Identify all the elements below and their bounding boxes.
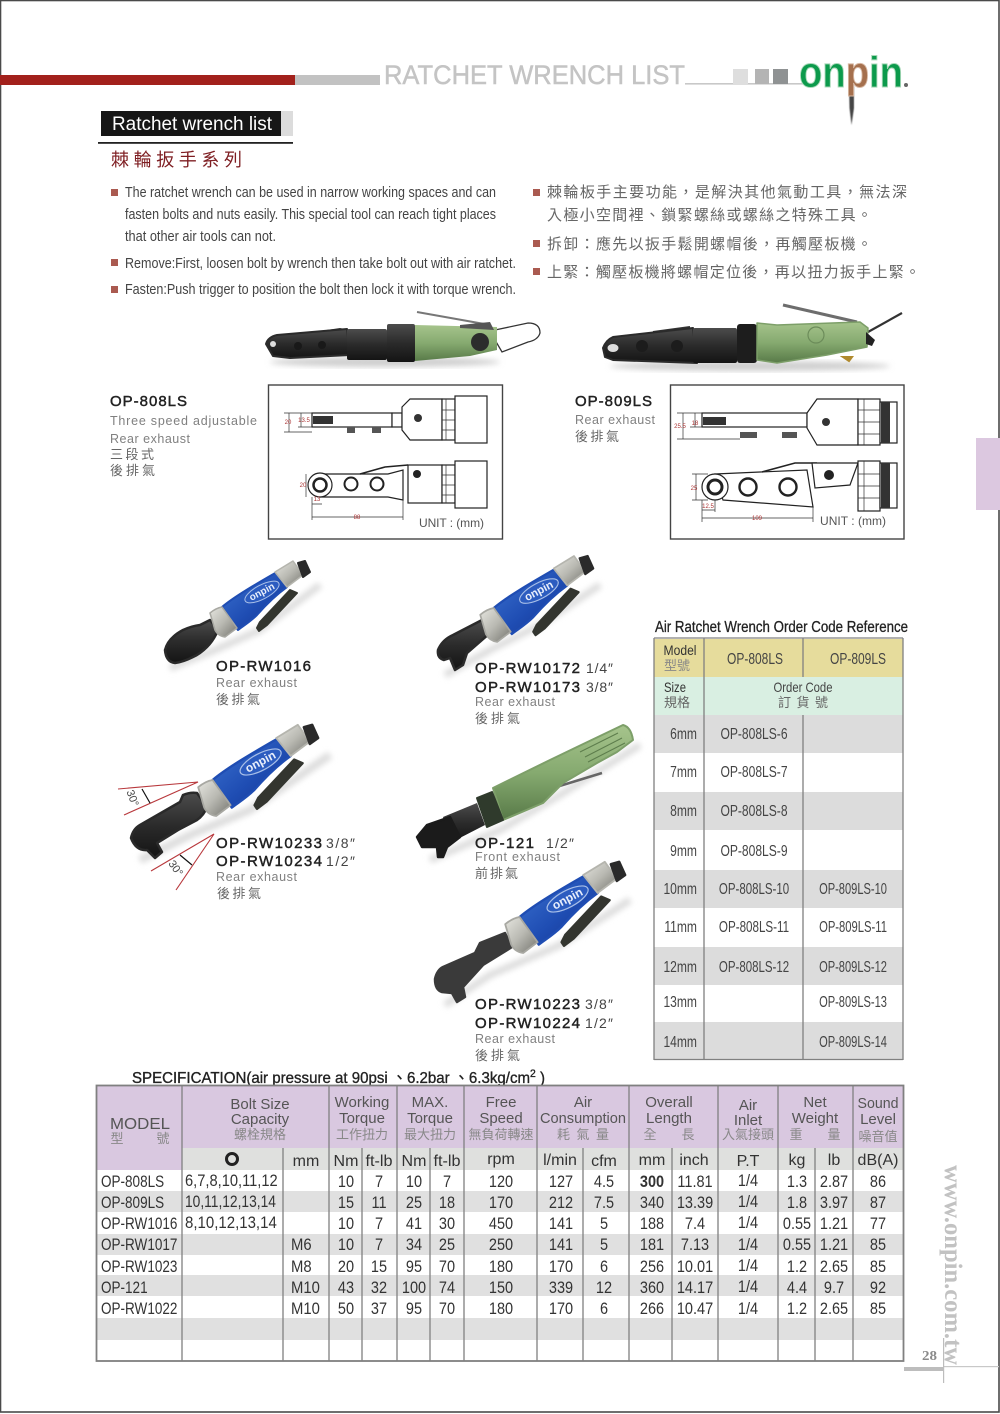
column: sound level: 86 <box>870 1173 886 1191</box>
spec table sub headers: lb <box>828 1152 840 1169</box>
column: working torque Nm: 10 <box>338 1215 354 1233</box>
English intro text: Remove:First, loosen bolt by wrench then take bolt out with air ratchet. <box>125 255 516 272</box>
column: working torque ft-lb: 15 <box>371 1258 387 1276</box>
column: weight lb: 2.65 <box>820 1300 848 1318</box>
column: max torque ft-lb: 70 <box>439 1300 455 1318</box>
column: working torque ft-lb: 7 <box>375 1236 383 1254</box>
column: weight kg <box>783 1173 811 1318</box>
spec table headers: 型 <box>110 1131 124 1146</box>
spec table sub headers: ft-lb <box>434 1153 461 1170</box>
label: OP-121: OP-121 <box>475 835 534 852</box>
spec table headers: Level <box>860 1111 896 1128</box>
Chinese intro text <box>533 184 920 281</box>
column: max torque Nm: 25 <box>406 1194 422 1212</box>
tool photo: OP-RW10233 / 10234: onpin <box>243 748 278 775</box>
side tab <box>976 438 1000 510</box>
column: max torque ft-lb: 7 <box>443 1173 451 1191</box>
label: OP-809LS: Rear exhaust <box>575 413 656 427</box>
column: length inch: 7.4 <box>685 1215 705 1233</box>
label: OP-809LS: OP-809LS <box>575 393 652 410</box>
spec table sub headers: mm <box>639 1152 665 1169</box>
column: sound level: 77 <box>870 1215 886 1233</box>
dimension diagram: OP-808LS: 13.5 <box>298 418 310 424</box>
order table header: Model <box>664 642 696 658</box>
tool photo: OP-121 <box>417 725 640 860</box>
column: air consumption cfm: 6 <box>600 1258 608 1276</box>
tool photo: OP-RW10172 / 10173: onpin <box>523 579 556 604</box>
column: air consumption l/min: 170 <box>549 1300 573 1318</box>
column: max torque ft-lb: 74 <box>439 1279 455 1297</box>
label: OP-808LS: 三段式 <box>110 447 154 462</box>
column: bolt size: 8,10,12,13,14 <box>185 1214 277 1232</box>
label: OP-RW10172 / 10173: OP-RW10172 <box>475 660 580 677</box>
spec table headers <box>110 1094 898 1146</box>
Chinese intro text: 棘輪板手主要功能，是解決其他氣動工具，無法深 <box>547 184 907 201</box>
column: air consumption l/min <box>549 1173 573 1318</box>
order table: size column: 10mm <box>663 880 697 897</box>
label: OP-809LS: 後排氣 <box>575 429 619 444</box>
onpin logo: onpin <box>799 48 903 97</box>
spec table sub headers: ft-lb <box>366 1153 393 1170</box>
angle marks: 30 degrees <box>118 782 214 890</box>
column: air consumption cfm: 5 <box>600 1236 608 1254</box>
order table: OP-808LS codes: OP-808LS-8 <box>720 802 788 819</box>
order table: OP-808LS codes: OP-808LS-9 <box>720 842 788 859</box>
spec table headers: Capacity <box>231 1111 290 1128</box>
Chinese intro text: 入極小空間裡、鎖緊螺絲或螺絲之特殊工具。 <box>547 207 872 224</box>
column: free speed: 450 <box>489 1215 513 1233</box>
dimension diagram: OP-809LS: 12.5 <box>702 504 714 510</box>
column: model: OP-121 <box>101 1279 148 1297</box>
column: working torque ft-lb: 11 <box>371 1194 387 1212</box>
spec table sub headers: mm <box>293 1153 319 1170</box>
label: OP-809LS <box>575 393 656 444</box>
column: free speed: 150 <box>489 1279 513 1297</box>
column: length mm: 360 <box>640 1279 664 1297</box>
spec table headers: Air <box>739 1097 757 1114</box>
label: OP-RW10223 / 10224: OP-RW10224 <box>475 1015 580 1032</box>
column: max torque ft-lb: 70 <box>439 1258 455 1276</box>
column: thread mm <box>291 1236 320 1318</box>
column: length inch: 10.47 <box>677 1300 713 1318</box>
order table: size column: 6mm <box>670 725 697 742</box>
column: length mm: 181 <box>640 1236 664 1254</box>
column: air consumption cfm: 6 <box>600 1300 608 1318</box>
order table: size column: 9mm <box>670 842 697 859</box>
label: OP-808LS: OP-808LS <box>110 393 187 410</box>
spec table headers: Torque <box>407 1110 453 1127</box>
column: weight lb: 3.97 <box>820 1194 848 1212</box>
tool photo: OP-RW1016 <box>165 561 320 668</box>
label: OP-808LS: Rear exhaust <box>110 432 191 446</box>
column: working torque ft-lb <box>371 1173 387 1318</box>
spec table headers: 重 <box>789 1127 803 1142</box>
column: working torque Nm: 50 <box>338 1300 354 1318</box>
label: OP-121 <box>475 835 574 881</box>
column: max torque Nm: 100 <box>402 1279 426 1297</box>
spec table headers: Bolt Size <box>230 1096 290 1113</box>
specification title: SPECIFICATION(air pressure at 90psi 、6.2bar 、6.3kg/cm <box>132 1070 555 1087</box>
column: length mm <box>640 1173 664 1318</box>
spec table sub headers: dB(A) <box>858 1152 898 1169</box>
order table: OP-808LS codes: OP-808LS-11 <box>719 918 789 935</box>
order table: size column: 8mm <box>670 802 697 819</box>
English intro text: that other air tools can not. <box>125 228 276 245</box>
spec table sub headers: cfm <box>591 1153 617 1170</box>
column: model: OP-RW1016 <box>101 1215 177 1233</box>
English intro text: The ratchet wrench can be used in narrow working spaces and can <box>125 184 496 201</box>
column: air consumption l/min: 127 <box>549 1173 573 1191</box>
spec table headers: 工作扭力 <box>336 1127 388 1142</box>
label: OP-RW10172 / 10173: 後排氣 <box>475 711 520 726</box>
dimension diagram: OP-809LS: 25.5 <box>674 424 686 430</box>
order table: OP-808LS codes: OP-808LS-10 <box>719 880 789 897</box>
column: air consumption l/min: 339 <box>549 1279 573 1297</box>
column: bolt size <box>185 1172 278 1232</box>
column: free speed: 180 <box>489 1258 513 1276</box>
order table header: OP-809LS <box>830 651 886 668</box>
dimension diagram: OP-808LS <box>268 385 502 539</box>
footer corner lines <box>904 1338 999 1383</box>
column: bolt size: 6,7,8,10,11,12 <box>185 1172 278 1190</box>
column: air consumption l/min: 212 <box>549 1194 573 1212</box>
Chinese intro text: 拆卸：應先以扳手鬆開螺帽後，再觸壓板機。 <box>547 235 872 253</box>
column: sound level: 85 <box>870 1258 886 1276</box>
column: air consumption cfm: 7.5 <box>594 1194 614 1212</box>
spec table sub headers: Nm <box>334 1153 358 1170</box>
column: air inlet: 1/4 <box>738 1172 758 1190</box>
label: OP-RW10233 / 10234: 後排氣 <box>217 886 261 901</box>
column: working torque Nm: 15 <box>338 1194 354 1212</box>
dimension diagram: OP-808LS: 13 <box>314 497 321 503</box>
label: OP-RW10233 / 10234 <box>216 835 355 901</box>
dimension diagram: OP-809LS <box>670 385 904 539</box>
dimension diagram: OP-808LS: 88 <box>354 515 361 521</box>
spec table sub headers: rpm <box>487 1151 515 1168</box>
column: length inch: 10.01 <box>677 1258 713 1276</box>
column: air inlet: 1/4 <box>738 1214 758 1232</box>
spec table sub headers: Nm <box>402 1153 426 1170</box>
angle marks: 30 degrees: 30° <box>165 858 185 879</box>
order table: size column: 13mm <box>663 993 697 1010</box>
order table: OP-808LS codes: OP-808LS-6 <box>720 725 788 742</box>
column: model: OP-808LS <box>101 1173 164 1191</box>
column: weight kg: 0.55 <box>783 1236 811 1254</box>
dimension diagram: OP-809LS: UNIT : (mm) <box>820 514 886 528</box>
specification title: ) <box>536 1070 545 1087</box>
label: OP-RW10233 / 10234: Rear exhaust <box>216 870 298 884</box>
column: weight lb: 1.21 <box>820 1215 848 1233</box>
column: length inch: 11.81 <box>677 1173 713 1191</box>
label: OP-RW1016: Rear exhaust <box>216 676 298 690</box>
spec table headers: Sound <box>858 1095 898 1112</box>
column: working torque ft-lb: 32 <box>371 1279 387 1297</box>
spec table headers: Overall <box>645 1094 693 1111</box>
spec table headers: 長 <box>681 1127 695 1142</box>
section heading <box>98 111 293 170</box>
spec table sub headers: l/min <box>543 1152 577 1169</box>
spec table headers: Net <box>803 1094 828 1111</box>
page number: 28 <box>922 1349 937 1364</box>
label: OP-RW10233 / 10234: OP-RW10234 <box>216 853 322 870</box>
column: max torque ft-lb: 25 <box>439 1236 455 1254</box>
label: OP-121: Front exhaust <box>475 850 561 864</box>
column: air consumption cfm: 4.5 <box>594 1173 614 1191</box>
column: sound level: 87 <box>870 1194 886 1212</box>
angle marks: 30 degrees: 30° <box>124 788 141 808</box>
dimension diagram: OP-809LS: 109 <box>752 516 763 522</box>
order table: OP-809LS codes: OP-809LS-13 <box>819 993 887 1010</box>
label: OP-RW10172 / 10173: 1/4″ <box>586 660 613 676</box>
column: working torque ft-lb: 7 <box>375 1215 383 1233</box>
spec table headers: Speed <box>479 1110 523 1127</box>
spec table headers: Weight <box>792 1110 839 1127</box>
website vertical text: www.onpin.com.tw <box>939 1165 966 1365</box>
column: length mm: 188 <box>640 1215 664 1233</box>
column: air inlet: 1/4 <box>738 1300 758 1318</box>
spec table headers: 量 <box>827 1127 841 1142</box>
column: length inch: 13.39 <box>677 1194 713 1212</box>
column: thread mm: M8 <box>291 1258 312 1276</box>
dimension diagram: OP-809LS: 25 <box>691 486 698 492</box>
label: OP-RW1016: OP-RW1016 <box>216 658 311 675</box>
English intro text <box>111 184 516 298</box>
column: working torque ft-lb: 7 <box>375 1173 383 1191</box>
column: working torque Nm: 10 <box>338 1236 354 1254</box>
column: working torque ft-lb: 37 <box>371 1300 387 1318</box>
label: OP-121: 前排氣 <box>475 866 518 881</box>
order table header: Order Code <box>774 679 833 695</box>
tool photo: OP-RW10223 / 10224 <box>435 862 630 1005</box>
label: OP-RW10223 / 10224 <box>475 996 613 1063</box>
banner title: RATCHET WRENCH LIST <box>384 60 685 90</box>
column: sound level: 85 <box>870 1300 886 1318</box>
tool photo: OP-RW10223 / 10224: onpin <box>550 885 585 912</box>
spec table headers: 無負荷轉速 <box>468 1127 534 1142</box>
column: working torque Nm: 43 <box>338 1279 354 1297</box>
column: model <box>101 1173 177 1318</box>
column: weight kg: 1.3 <box>787 1173 807 1191</box>
label: OP-RW1016 <box>216 658 311 707</box>
column: air consumption cfm: 12 <box>596 1279 612 1297</box>
column: free speed: 170 <box>489 1194 513 1212</box>
order code table title: Air Ratchet Wrench Order Code Reference <box>655 619 908 636</box>
column: length mm: 266 <box>640 1300 664 1318</box>
order table header: 訂貨號 <box>778 695 828 710</box>
order table: OP-809LS codes: OP-809LS-12 <box>819 958 887 975</box>
column: free speed: 250 <box>489 1236 513 1254</box>
column: sound level: 85 <box>870 1236 886 1254</box>
column: weight kg: 0.55 <box>783 1215 811 1233</box>
column: model: OP-RW1022 <box>101 1300 177 1318</box>
column: max torque ft-lb: 30 <box>439 1215 455 1233</box>
label: OP-808LS <box>110 393 257 478</box>
column: length mm: 256 <box>640 1258 664 1276</box>
order table: OP-809LS codes: OP-809LS-10 <box>819 880 887 897</box>
spec table headers: 入氣接頭 <box>722 1127 774 1142</box>
order table: size column: 14mm <box>663 1033 697 1050</box>
order table header: 型號 <box>664 658 690 673</box>
column: air consumption l/min: 141 <box>549 1236 573 1254</box>
specification table <box>96 1085 904 1361</box>
label: OP-808LS: 後排氣 <box>110 463 155 478</box>
column: weight lb: 2.87 <box>820 1173 848 1191</box>
order table: size column <box>663 725 697 1050</box>
label: OP-RW10223 / 10224: 後排氣 <box>475 1048 520 1063</box>
column: max torque ft-lb <box>439 1173 455 1318</box>
column: air consumption cfm: 5 <box>600 1215 608 1233</box>
column: sound level: 92 <box>870 1279 886 1297</box>
banner squares <box>733 69 788 84</box>
dimension diagram: OP-808LS: 20 <box>285 420 292 426</box>
order table header <box>664 642 886 710</box>
spec table headers: Inlet <box>734 1112 763 1129</box>
English intro text: Fasten:Push trigger to position the bolt then lock it with torque wrench. <box>125 281 516 298</box>
spec table sub headers <box>226 1151 898 1170</box>
order table: OP-808LS codes: OP-808LS-12 <box>719 958 789 975</box>
column: thread mm: M6 <box>291 1236 312 1254</box>
column: weight lb: 9.7 <box>824 1279 844 1297</box>
label: OP-RW10233 / 10234: 1/2″ <box>326 853 355 869</box>
column: free speed <box>489 1173 513 1318</box>
Chinese heading: 棘輪扳手系列 <box>111 150 242 170</box>
spec table headers: 耗氣量 <box>557 1127 609 1142</box>
order table header: 規格 <box>664 695 690 710</box>
dimension diagram: OP-808LS: UNIT : (mm) <box>419 516 484 530</box>
order table: OP-809LS codes: OP-809LS-14 <box>819 1033 887 1050</box>
spec table headers: 噪音值 <box>858 1129 898 1144</box>
column: weight lb: 1.21 <box>820 1236 848 1254</box>
spec table headers: Consumption <box>540 1110 626 1127</box>
column: length inch: 7.13 <box>681 1236 709 1254</box>
label: OP-RW10172 / 10173: 3/8″ <box>586 679 613 695</box>
label: OP-808LS: Three speed adjustable <box>110 414 257 428</box>
spec table headers: MODEL <box>110 1116 170 1133</box>
column: max torque ft-lb: 18 <box>439 1194 455 1212</box>
column: sound level <box>870 1173 886 1318</box>
column: air consumption l/min: 141 <box>549 1215 573 1233</box>
column: weight kg: 1.2 <box>787 1300 807 1318</box>
column: bolt size: 10,11,12,13,14 <box>185 1193 276 1211</box>
spec table headers: MAX. <box>412 1094 448 1111</box>
order table: OP-808LS codes: OP-808LS-7 <box>720 763 788 780</box>
order table: size column: 12mm <box>663 958 697 975</box>
spec table headers: 最大扭力 <box>404 1127 456 1142</box>
label: OP-RW10172 / 10173: OP-RW10173 <box>475 679 580 696</box>
column: thread mm: M10 <box>291 1279 320 1297</box>
column: model: OP-809LS <box>101 1194 164 1212</box>
tool photo: OP-RW1016: onpin <box>248 581 277 604</box>
column: max torque Nm: 95 <box>406 1300 422 1318</box>
column: length inch: 14.17 <box>677 1279 713 1297</box>
spec table headers: Air <box>574 1094 592 1111</box>
label: OP-RW10223 / 10224: OP-RW10223 <box>475 996 580 1013</box>
label: OP-RW1016: 後排氣 <box>216 692 260 707</box>
label: OP-RW10223 / 10224: 3/8″ <box>585 996 613 1012</box>
order table header: OP-808LS <box>727 651 783 668</box>
tool photo: OP-809LS <box>603 305 902 371</box>
English intro text: fasten bolts and nuts easily. This special tool can reach tight places <box>125 206 496 223</box>
column: air consumption cfm <box>594 1173 614 1318</box>
label: OP-121: 1/2″ <box>546 835 574 851</box>
spec table headers: Free <box>486 1094 516 1111</box>
tool photo: OP-RW10233 / 10234 <box>131 725 330 860</box>
column: weight lb <box>820 1173 848 1318</box>
spec table headers: Length <box>646 1110 692 1127</box>
specification title: 2 <box>530 1068 536 1080</box>
label: OP-RW10172 / 10173 <box>475 660 613 726</box>
order table: OP-809LS codes <box>819 880 887 1050</box>
column: weight lb: 2.65 <box>820 1258 848 1276</box>
column: thread mm: M10 <box>291 1300 320 1318</box>
column: length inch <box>677 1173 713 1318</box>
spec table sub headers: kg <box>789 1152 805 1169</box>
spec table headers: Torque <box>339 1110 385 1127</box>
column: max torque Nm: 95 <box>406 1258 422 1276</box>
header banner <box>0 60 805 90</box>
section heading: Ratchet wrench list <box>112 114 273 135</box>
column: weight kg: 1.8 <box>787 1194 807 1212</box>
column: free speed: 120 <box>489 1173 513 1191</box>
column: model: OP-RW1017 <box>101 1236 177 1254</box>
column: air inlet: 1/4 <box>738 1257 758 1275</box>
label: OP-RW10223 / 10224: 1/2″ <box>585 1015 613 1031</box>
spec table sub headers: inch <box>679 1152 709 1169</box>
order table: size column: 11mm <box>664 918 697 935</box>
column: working torque Nm <box>338 1173 354 1318</box>
column: air consumption l/min: 170 <box>549 1258 573 1276</box>
column: length mm: 340 <box>640 1194 664 1212</box>
column: max torque Nm <box>402 1173 426 1318</box>
column: weight kg: 4.4 <box>787 1279 807 1297</box>
dimension diagram: OP-809LS: 18 <box>692 421 699 427</box>
label: OP-RW10223 / 10224: Rear exhaust <box>475 1032 556 1046</box>
order table header: Size <box>664 679 686 695</box>
tool photo: OP-808LS <box>266 312 540 367</box>
order table: size column: 7mm <box>670 763 697 780</box>
onpin logo <box>799 48 908 125</box>
order table: OP-808LS codes <box>719 725 789 975</box>
column: air inlet: 1/4 <box>738 1236 758 1254</box>
dimension diagram: OP-808LS: 20 <box>300 483 307 489</box>
spec table headers: 全 <box>643 1127 657 1142</box>
column: max torque Nm: 34 <box>406 1236 422 1254</box>
column: air inlet: 1/4 <box>738 1193 758 1211</box>
label: OP-RW10233 / 10234: 3/8″ <box>326 835 355 851</box>
column: air inlet <box>738 1172 758 1318</box>
label: OP-RW10233 / 10234: OP-RW10233 <box>216 835 322 852</box>
column: working torque Nm: 20 <box>338 1258 354 1276</box>
label: OP-RW10172 / 10173: Rear exhaust <box>475 695 556 709</box>
spec table headers: Working <box>335 1094 389 1111</box>
tool photo: OP-RW10172 / 10173 <box>438 556 600 675</box>
spec table sub headers: P.T <box>737 1153 760 1170</box>
column: weight kg: 1.2 <box>787 1258 807 1276</box>
column: max torque Nm: 10 <box>406 1173 422 1191</box>
spec table headers: 螺栓規格 <box>234 1127 286 1142</box>
order code table <box>654 638 903 1060</box>
column: model: OP-RW1023 <box>101 1258 177 1276</box>
order table: OP-809LS codes: OP-809LS-11 <box>819 918 887 935</box>
column: working torque Nm: 10 <box>338 1173 354 1191</box>
column: length mm: 300 <box>640 1173 664 1191</box>
Chinese intro text: 上緊：觸壓板機將螺帽定位後，再以扭力扳手上緊。 <box>547 264 920 281</box>
column: max torque Nm: 41 <box>406 1215 422 1233</box>
column: free speed: 180 <box>489 1300 513 1318</box>
spec table headers: 號 <box>156 1131 170 1146</box>
column: air inlet: 1/4 <box>738 1278 758 1296</box>
